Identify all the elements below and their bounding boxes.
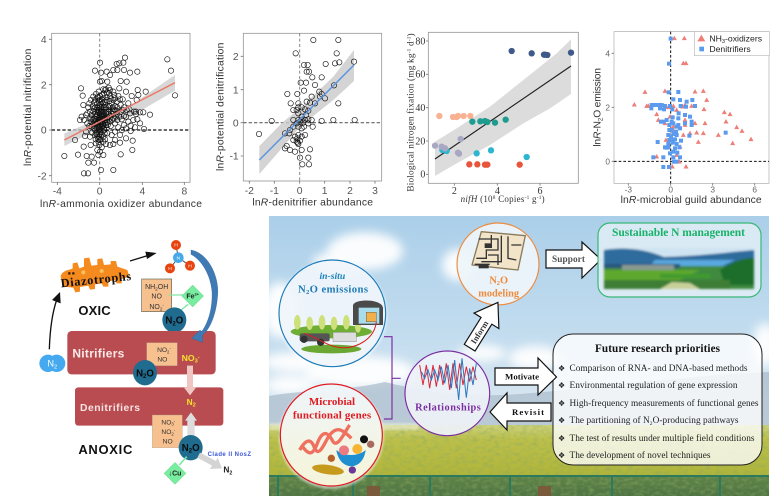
photo: landscape xyxy=(604,248,754,289)
box: denitrifier intermediates anoxic: - xyxy=(174,428,176,433)
chart: N2O emission vs microbial guild abundance xyxy=(593,32,769,206)
panel: nitrifiers: N xyxy=(136,368,143,379)
bullet list: Comparison of RNA- and DNA-based methods xyxy=(570,363,748,374)
arrow: motivate: Motivate xyxy=(505,372,539,382)
icon: N2O bubble anoxic xyxy=(179,435,203,460)
tick labels: 3 xyxy=(710,184,715,194)
y axis label: -1 xyxy=(406,48,412,53)
panel: denitrifiers: 2 xyxy=(193,403,196,409)
chart: biological nitrogen fixation vs nifH xyxy=(405,32,578,204)
x axis label: Copies xyxy=(496,194,525,204)
icon: Fe2+ diamond: Fe xyxy=(186,293,194,300)
panel: in-situ N2O emissions: 2 xyxy=(306,289,309,296)
box: denitrifier intermediates anoxic: 3 xyxy=(171,422,174,427)
panel: field photograph background xyxy=(262,216,777,496)
bullet list: ❖ xyxy=(558,381,565,390)
icon: Cu diamond xyxy=(164,457,187,484)
chart: potential denitrification vs denitrifier abundance xyxy=(215,33,382,208)
panel: future research priorities xyxy=(553,334,762,465)
x axis label: lnR-ammonia oxidizer abundance xyxy=(40,199,202,210)
tick labels: 0 xyxy=(97,187,103,198)
label xyxy=(478,275,520,300)
legend xyxy=(694,32,769,56)
label: N xyxy=(489,275,497,286)
arrow: nitrate to N2 xyxy=(184,366,196,395)
x axis label: -1 xyxy=(537,195,542,201)
icon: N2O bubble oxic: N xyxy=(165,316,172,327)
tick labels: -2 xyxy=(245,186,254,197)
box: denitrifier intermediates anoxic: NO xyxy=(161,419,171,426)
y axis label: O emission xyxy=(593,68,604,118)
arrow: N2O to N2 grey xyxy=(185,412,197,438)
icon: ammonia molecule xyxy=(165,240,195,273)
tick labels: 4 xyxy=(139,187,145,198)
tick labels: 6 xyxy=(537,186,542,197)
bullet list: ❖ xyxy=(558,451,565,460)
panel: denitrifiers: Denitrifiers xyxy=(80,403,140,414)
icon: enzyme bowl xyxy=(328,435,374,474)
bullet list: Environmental regulation of gene expression xyxy=(570,380,738,391)
icon: N2O bubble anoxic: O xyxy=(192,443,200,454)
panel: nitrifiers: NO xyxy=(157,357,167,364)
x axis label: g xyxy=(530,194,537,204)
box: denitrifier intermediates anoxic xyxy=(152,415,182,448)
box: denitrifier intermediates anoxic: NO xyxy=(161,429,171,436)
box: nitrifier intermediates oxic: 2 xyxy=(160,306,163,311)
y axis label: Biological nitrogen fixation (mg kg xyxy=(406,53,416,192)
arrow: N2 to diazotrophs xyxy=(49,292,61,349)
y axis label: lnR-potential nitrification xyxy=(23,48,34,166)
panel: nitrifiers: 2 xyxy=(143,374,147,380)
x axis label: 8 xyxy=(493,195,496,201)
icon: Fe2+ diamond: 2+ xyxy=(194,292,200,297)
arrow: inform xyxy=(457,295,510,355)
tick labels: 0 xyxy=(297,186,303,197)
tick labels xyxy=(415,36,542,197)
y axis label: lnR-N xyxy=(593,121,604,147)
box: nitrifier intermediates oxic: - xyxy=(162,303,164,308)
bullet list: O-producing pathways xyxy=(653,416,739,426)
icon: N2 source bubble: N xyxy=(48,359,54,369)
label: Clade II NosZ: Clade II NosZ xyxy=(208,452,251,458)
label: ANOXIC: ANOXIC xyxy=(78,442,133,457)
x axis label: lnR-microbial guild abundance xyxy=(621,195,762,206)
y axis label: 2 xyxy=(598,117,605,121)
label: OXIC: OXIC xyxy=(78,303,111,318)
panel: in-situ N2O emissions xyxy=(277,260,387,370)
chart: oscillating lines icon xyxy=(420,358,476,400)
box: nitrifier intermediates oxic: 2 xyxy=(155,286,158,291)
label: product N2: 2 xyxy=(229,470,232,476)
panel: nitrifiers: 3 xyxy=(195,359,198,365)
tick labels: 0 xyxy=(668,184,673,194)
tick labels: 4 xyxy=(41,35,47,46)
y axis label: lnR-potential denitrification xyxy=(215,42,226,171)
bullet list xyxy=(558,363,759,461)
panel: microbial functional genes: functional genes xyxy=(293,409,371,421)
box: nitrifier intermediates oxic xyxy=(142,279,172,312)
panel: denitrifiers: N xyxy=(187,397,193,407)
icon: crop plants xyxy=(291,315,372,353)
label: Relationships xyxy=(415,403,481,414)
arrow: ammonia to nitrate xyxy=(191,250,218,342)
icon: Fe2+ diamond xyxy=(169,285,204,313)
tick labels: 2 xyxy=(605,102,610,112)
icon: N2 source bubble xyxy=(39,355,65,372)
label: 2 xyxy=(497,280,500,287)
label: modeling xyxy=(478,289,520,300)
y axis label: d xyxy=(406,41,416,49)
heading: Sustainable N management xyxy=(612,227,745,239)
panel: in-situ N2O emissions: N xyxy=(298,284,306,295)
x axis label: lnR-denitrifier abundance xyxy=(252,197,373,208)
panel: nitrifiers: 2 xyxy=(167,349,170,354)
panel: nitrogen cycle diagram xyxy=(39,240,251,484)
icon: DNA helix xyxy=(300,425,351,453)
y axis label: ) xyxy=(405,33,416,36)
arrow: support: Support xyxy=(552,255,586,265)
icon: diazotrophs bacterium xyxy=(60,258,132,292)
tick labels: 2 xyxy=(452,186,457,197)
legend: 3 xyxy=(722,39,725,45)
panel: nitrifiers: - xyxy=(169,346,171,351)
tick labels xyxy=(37,35,187,198)
tick labels: -2 xyxy=(37,171,47,182)
panel: denitrifiers xyxy=(75,387,223,426)
tick labels xyxy=(229,52,378,197)
tick labels: 0 xyxy=(233,118,239,129)
arrow: inform: Inform xyxy=(469,319,490,346)
tick labels: 2 xyxy=(347,186,353,197)
arrow: clade II NosZ to N2 xyxy=(197,453,222,469)
tick labels: 0 xyxy=(420,170,425,181)
tick labels: -1 xyxy=(229,152,239,163)
panel: in-situ N2O emissions: O emissions xyxy=(310,284,368,295)
tick labels: 4 xyxy=(605,48,610,58)
panel: nitrifiers: Nitrifiers xyxy=(72,347,125,361)
tick labels: 60 xyxy=(415,70,425,81)
tick labels: -3 xyxy=(625,184,632,194)
box: nitrifier intermediates oxic: OH xyxy=(158,284,168,291)
box: denitrifier intermediates anoxic: - xyxy=(174,418,176,423)
tick labels: 2 xyxy=(233,52,239,63)
bullet list: The development of novel techniques xyxy=(570,450,711,461)
tick labels: 6 xyxy=(752,184,757,194)
connector: bracket to relationships xyxy=(384,337,401,419)
tick labels: 40 xyxy=(415,103,425,114)
icon: circuit board xyxy=(472,232,525,270)
icon: ammonia molecule: H xyxy=(168,266,172,272)
tick labels: 4 xyxy=(495,186,500,197)
arrow: diazotrophs to ammonia xyxy=(130,252,157,261)
panel: nitrifiers: NO xyxy=(157,347,167,354)
tick labels: 80 xyxy=(415,36,425,47)
panel: microbial functional genes xyxy=(279,384,384,489)
x axis label: -1 xyxy=(525,195,530,201)
tick labels: 2 xyxy=(41,80,47,91)
tick labels: 1 xyxy=(322,186,328,197)
icon: ammonia molecule: N xyxy=(177,255,181,261)
box: denitrifier intermediates anoxic: NO xyxy=(163,439,173,446)
panel: sustainable N management xyxy=(598,223,761,297)
arrow: revisit: Revisit xyxy=(512,407,544,417)
bullet list: ❖ xyxy=(558,364,565,373)
arrow: revisit xyxy=(490,393,551,430)
heading: in-situ xyxy=(319,271,346,282)
tick labels: 8 xyxy=(181,187,187,198)
label: product N2: N xyxy=(223,465,229,475)
tick labels: 20 xyxy=(415,136,425,147)
heading: Microbial xyxy=(309,396,355,408)
y axis label: -1 xyxy=(406,36,412,41)
box: nitrifier intermediates oxic: NO xyxy=(151,294,162,301)
tick labels: 0 xyxy=(605,156,610,166)
box: nitrifier intermediates oxic: NH xyxy=(145,284,155,291)
label: O xyxy=(500,275,508,286)
icon: diazotrophs bacterium: Diazotrophs xyxy=(60,269,132,290)
x axis label: ) xyxy=(542,194,545,204)
icon: N2O bubble oxic xyxy=(162,307,186,333)
bullet list: ❖ xyxy=(558,434,565,443)
bullet list: The test of results under multiple field conditions xyxy=(570,433,755,444)
icon: N2O bubble oxic: O xyxy=(176,316,184,327)
bullet list: ❖ xyxy=(558,416,565,425)
heading: Future research priorities xyxy=(595,343,721,355)
icon: ammonia molecule: H xyxy=(188,263,192,269)
arrow: support xyxy=(546,242,601,278)
bullet list: 2 xyxy=(650,421,653,427)
box: denitrifier intermediates anoxic: 2 xyxy=(171,431,174,436)
legend: Denitrifiers xyxy=(709,44,751,54)
tick labels: -1 xyxy=(270,186,279,197)
chart: potential nitrification vs ammonia oxidizer abundance xyxy=(23,33,202,210)
icon: N2O bubble anoxic: 2 xyxy=(189,449,193,455)
tick labels: 0 xyxy=(41,126,47,137)
icon: gas analyzer and chamber xyxy=(300,300,383,348)
bullet list: High-frequency measurements of functional genes xyxy=(570,398,759,409)
arrow: motivate xyxy=(495,358,556,395)
bullet list: ❖ xyxy=(558,399,565,408)
panel: nitrifiers: - xyxy=(198,355,200,361)
icon: N2O bubble oxic: 2 xyxy=(172,321,176,327)
x axis label: nifH (10 xyxy=(461,194,493,204)
panel: nitrifiers xyxy=(67,331,216,385)
panel: N2O modeling xyxy=(457,223,539,305)
icon: N2O bubble anoxic: N xyxy=(182,443,189,454)
icon: Cu diamond: ↓Cu xyxy=(169,471,181,478)
tick labels: 3 xyxy=(372,186,378,197)
panel: relationships xyxy=(405,351,490,436)
panel: nitrifiers: NO xyxy=(182,353,195,363)
icon: bacterium xyxy=(312,463,344,477)
icon: ammonia molecule: H xyxy=(174,243,178,249)
legend: -oxidizers xyxy=(725,33,763,43)
panel: nitrifiers: O xyxy=(146,368,154,379)
tick labels: 1 xyxy=(233,85,239,96)
bullet list: The partitioning of N xyxy=(570,416,650,426)
tick labels: -4 xyxy=(53,187,62,198)
tick labels xyxy=(605,48,757,194)
legend: NH xyxy=(709,33,722,43)
box: nitrifier intermediates oxic: NO xyxy=(149,304,160,311)
icon: N2 source bubble: 2 xyxy=(54,364,57,370)
